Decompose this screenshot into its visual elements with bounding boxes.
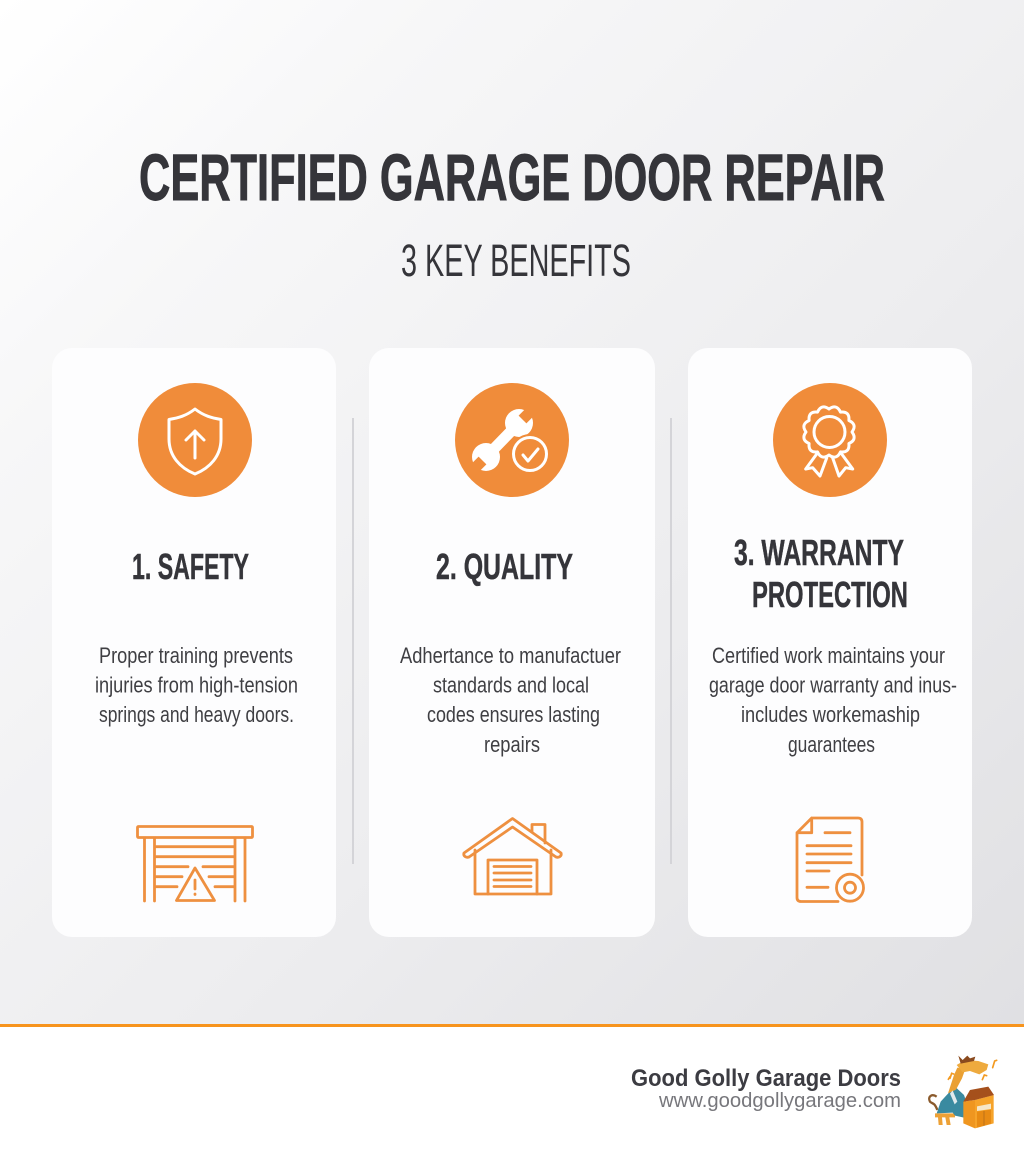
brand name: Good Golly Garage Doors — [631, 1065, 901, 1092]
text: safety description: Proper training prevents — [99, 643, 293, 668]
text: warranty description: includes workemaship — [741, 702, 920, 727]
text: quality description: standards and local — [433, 672, 589, 698]
text: warranty description: guarantees — [788, 732, 875, 757]
text: warranty description — [709, 643, 957, 757]
footer — [0, 1024, 1024, 1154]
icon: shield with arrow — [138, 383, 252, 497]
heading: warranty protection — [734, 532, 908, 615]
heading: quality: 2. QUALITY — [436, 546, 573, 587]
divider — [670, 418, 672, 864]
icon: warranty document — [797, 818, 864, 902]
icon: house with garage — [464, 818, 561, 894]
divider — [352, 418, 354, 864]
subtitle: 3 KEY BENEFITS — [401, 235, 631, 286]
text: safety description: injuries from high-tension — [95, 672, 298, 698]
panel: safety — [52, 348, 336, 937]
text: warranty description: garage door warranty and inus- — [709, 672, 957, 698]
text: quality description: codes ensures lasting — [427, 702, 600, 727]
text: quality description: repairs — [484, 732, 540, 757]
heading: warranty protection: 3. WARRANTY — [734, 532, 904, 573]
icon: giraffe mascot with garage — [929, 1056, 997, 1128]
heading: warranty protection: PROTECTION — [752, 574, 908, 615]
heading: safety: 1. SAFETY — [132, 546, 249, 587]
text: quality description: Adhertance to manufactuer — [400, 643, 621, 668]
text: safety description: springs and heavy doors. — [99, 702, 294, 727]
text: quality description — [400, 643, 621, 757]
website: www.goodgollygarage.com — [658, 1090, 901, 1112]
icon: award ribbon — [773, 383, 887, 497]
text: warranty description: Certified work maintains your — [712, 643, 945, 668]
icon: wrench with check — [455, 383, 569, 497]
icon: garage door with warning — [138, 826, 252, 901]
panel: warranty protection — [688, 348, 972, 937]
panel: quality — [369, 348, 655, 937]
text: safety description — [95, 643, 298, 727]
